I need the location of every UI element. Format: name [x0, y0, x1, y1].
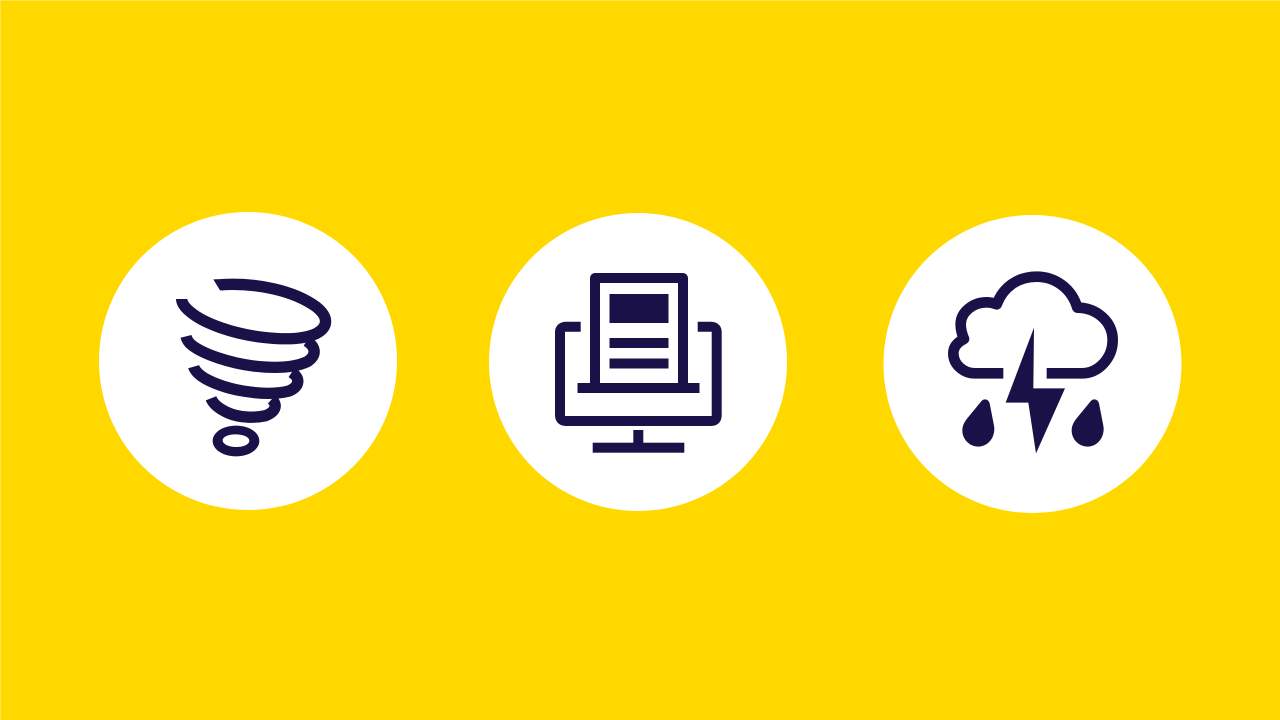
tornado ring 1	[182, 279, 326, 339]
tornado ring 4	[211, 398, 275, 417]
icon: tornado	[182, 279, 326, 456]
panel: tornado badge	[99, 212, 397, 510]
tornado ring 2	[186, 336, 314, 367]
document text line 1	[610, 338, 668, 348]
document outline	[595, 278, 683, 384]
panel: document on monitor badge	[489, 213, 787, 511]
white circle: storm	[884, 215, 1182, 513]
monitor frame	[560, 327, 717, 421]
white circle: monitor	[489, 213, 787, 511]
cloud outline	[953, 277, 1113, 373]
tornado base ring	[213, 426, 259, 456]
lightning bolt	[1006, 328, 1065, 453]
document text line 2	[610, 358, 668, 368]
panel: storm badge	[884, 215, 1182, 513]
tornado ring 3	[194, 367, 298, 393]
document image block	[610, 294, 668, 323]
rain drop left	[962, 399, 994, 447]
icon: document on monitor	[560, 278, 717, 453]
white circle: tornado	[99, 212, 397, 510]
rain drop right	[1072, 399, 1104, 447]
icon: storm cloud with lightning and rain	[953, 277, 1113, 453]
monitor stem	[633, 430, 643, 444]
document base bar	[578, 383, 700, 393]
monitor foot	[593, 443, 684, 453]
